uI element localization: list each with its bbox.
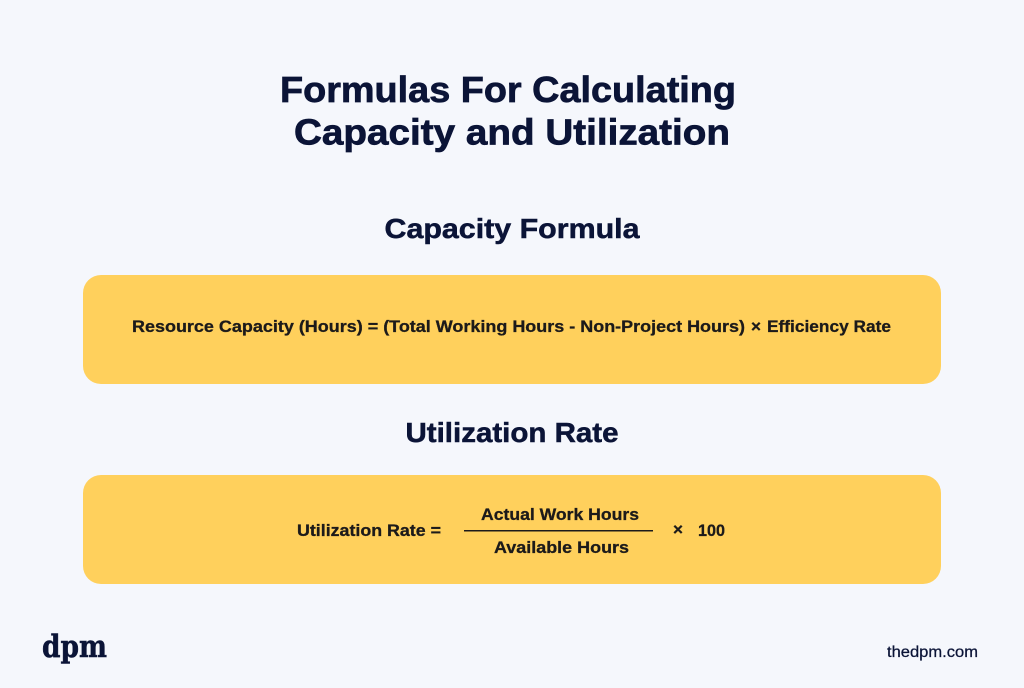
title (280, 69, 736, 152)
formula label: Utilization Rate = (297, 521, 441, 540)
panel: utilization rate (83, 475, 941, 584)
fraction: Actual Work Hours (481, 505, 639, 524)
fraction (464, 505, 653, 557)
heading: utilization rate: Utilization Rate (406, 417, 618, 448)
formula text: resource capacity: Efficiency Rate (767, 317, 891, 336)
website url: thedpm.com (887, 644, 978, 661)
multiplier: × (673, 520, 683, 539)
multiplier: 100 (698, 521, 725, 540)
logo: dpm: dpm (42, 629, 107, 665)
fraction: Available Hours (494, 538, 629, 557)
formula text: resource capacity: × (751, 317, 761, 336)
title: Capacity and Utilization (294, 112, 730, 152)
title: Formulas For Calculating (280, 69, 736, 110)
formula text: resource capacity: Resource Capacity (Hours) = (Total Working Hours - Non-Project Hours) (132, 317, 745, 336)
heading: capacity formula: Capacity Formula (384, 213, 640, 244)
multiplier (673, 520, 725, 540)
panel: capacity formula (83, 275, 941, 384)
